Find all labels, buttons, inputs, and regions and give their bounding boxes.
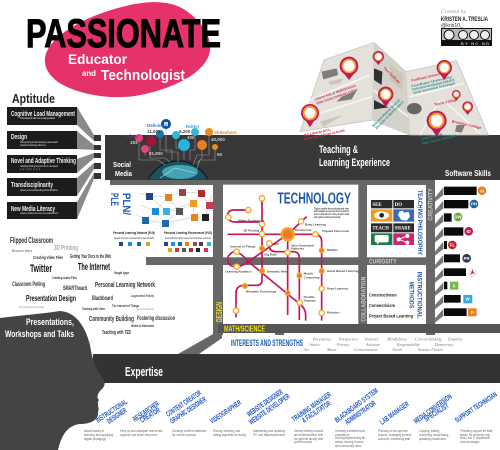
technology description [313, 206, 350, 219]
expertise roles: TRAINING MANAGER [290, 390, 333, 424]
word cloud [10, 236, 175, 336]
math science label: MATH/SCIENCE [224, 324, 265, 334]
map: Associate HS [421, 132, 443, 141]
metro labels: MOOCs [327, 248, 338, 252]
interests and strengths: Science Fiction [418, 347, 443, 352]
word cloud: Classroom Polling [12, 282, 45, 288]
presentations label [5, 317, 74, 339]
expertise roles [94, 386, 499, 427]
expertise band [93, 354, 500, 383]
expertise descriptions: and implementation both [294, 433, 323, 437]
word cloud: Blackboard [92, 296, 113, 302]
technology title: TECHNOLOGY [277, 190, 351, 207]
map: Math Teacher 2002-2006 [422, 134, 457, 146]
interests and strengths: Critical thinking [415, 336, 442, 342]
methods list: Connectivism [369, 303, 395, 309]
PLN PLE captions: Personal Learning Network (PLN) [113, 231, 156, 235]
expertise label: Expertise [125, 364, 163, 379]
expertise descriptions [84, 429, 493, 448]
metro labels: Computing [304, 275, 320, 279]
methods list: Project Based Learning [369, 313, 413, 319]
social labels: 193 [130, 140, 138, 145]
methods list: Constructivism [369, 293, 397, 299]
expertise roles: MEDIA CONVERSION [412, 392, 454, 426]
interests and strengths [231, 336, 462, 352]
social labels: Delicious [147, 123, 168, 128]
map [300, 42, 488, 146]
word cloud: Getting Your Docs to the Web [70, 254, 111, 260]
social labels: 6,200 [179, 129, 191, 134]
PLN PLE heading [108, 193, 132, 215]
metro labels: Learning Analytics [225, 269, 252, 273]
aptitude: Adapting thinking beyond rote or rule-based [20, 165, 59, 168]
expertise descriptions: organize and share resources [120, 433, 157, 437]
expertise descriptions: Creating content materials [172, 429, 206, 433]
metro labels: Displays [304, 298, 316, 302]
credit: Created by [441, 9, 467, 15]
map labels: BS Liberal Arts, [304, 128, 331, 138]
software icons: DW [454, 215, 463, 220]
social labels: 11,000 [147, 129, 161, 134]
word cloud: The Internet [78, 262, 110, 273]
PLN PLE captions: Tools and information used to find and share resources [165, 236, 211, 240]
right panels [361, 181, 500, 324]
aptitude: Transdisciplinarity [11, 182, 53, 189]
word cloud: Creating Video Files [33, 255, 63, 260]
expertise descriptions: learning and applying [84, 433, 113, 437]
expertise descriptions: heads and managers. [460, 440, 480, 444]
map labels: Fordham University [411, 71, 446, 83]
expertise descriptions: digital pedagogy [84, 437, 106, 441]
interests and strengths: Justice [309, 342, 320, 347]
interests and strengths: Travel [392, 347, 403, 352]
network icons [142, 189, 213, 227]
word cloud: Google Apps [114, 270, 129, 275]
metro labels: Flexible [304, 295, 315, 299]
map: New York Medical Services [371, 98, 401, 128]
expertise descriptions: specific schools [294, 440, 312, 444]
map labels: Pace Certificate [383, 66, 401, 84]
aptitude: Literacy and understanding across disciplines [20, 189, 59, 192]
aptitude connectors [77, 107, 94, 219]
globe [148, 160, 208, 179]
PLN PLE captions: Network of people connected with to learn from/with [114, 236, 154, 240]
grey structural frame [110, 178, 435, 354]
expertise descriptions: for online courses [172, 433, 196, 437]
PLN PLE heading: PLE [108, 193, 120, 206]
software icons: X [453, 283, 456, 288]
software icons: W [466, 297, 471, 302]
interests and strengths: Activism [365, 342, 380, 347]
title: PASSIONATE [26, 12, 221, 56]
social labels: 81,800 [149, 151, 163, 156]
expertise roles: WEBSITE DEVELOPER [247, 392, 292, 427]
subtitle: Educator [68, 51, 128, 67]
expertise roles: INSTRUCTIONAL [94, 397, 129, 425]
interests and strengths: INTERESTS AND STRENGTHS [231, 338, 303, 348]
social labels: Twitter [185, 124, 200, 129]
word cloud: SMARTboard [63, 286, 87, 292]
band labels: Learning Experience [319, 157, 390, 169]
subtitle [68, 51, 185, 84]
map: Senior Instructional Technologist [413, 81, 456, 95]
metro labels: Deep Learning [305, 222, 326, 226]
metro labels [225, 218, 359, 315]
metro labels: Batteries [291, 246, 304, 250]
expertise descriptions: ITC and Blackboard sites [253, 433, 285, 437]
expertise descriptions: Copying, editing, [419, 429, 440, 433]
map labels: University of Texas at Austin [304, 128, 345, 142]
metro labels: Wearable Technology [246, 289, 277, 293]
word cloud: 3D Printing [54, 245, 78, 252]
metro labels: Maker Technology [238, 218, 265, 222]
social media label [113, 160, 133, 178]
interests and strengths: Patience [364, 336, 379, 342]
metro labels: Flipped Classroom [322, 229, 350, 233]
interests and strengths: Music [326, 347, 337, 352]
software icons: FL [450, 243, 455, 248]
presentations label: Presentations, [26, 317, 74, 327]
aptitude: solutions [20, 168, 41, 171]
expertise roles: CREATOR [138, 405, 162, 425]
software icons: PH [471, 202, 477, 207]
map: Fordham University [411, 75, 453, 88]
PLN PLE heading: PLN/ [120, 193, 132, 215]
map labels: Ulster County Community College [316, 88, 358, 106]
math science band [218, 324, 500, 333]
philosophy grid: TEACH [372, 226, 389, 231]
aptitude: Design [11, 134, 27, 141]
metro labels: Deep Learning [327, 287, 348, 291]
philosophy grid: SHARE [395, 226, 411, 231]
social labels [126, 123, 237, 157]
metro labels: Internet of Things [230, 244, 256, 248]
technology description: Topics within the evolving and ever [314, 206, 350, 210]
aptitude: Assess, develop and use new media content [20, 212, 58, 215]
software wedges [435, 187, 443, 323]
expertise descriptions: converting, compressing, [419, 433, 449, 437]
aptitude: process for learning outcomes [20, 144, 47, 147]
word cloud: Browser Wars [12, 249, 32, 253]
philosophy grid [371, 200, 414, 245]
expertise descriptions: desk, and IT department [460, 436, 490, 440]
interests and strengths: Perspective [338, 336, 358, 342]
interests and strengths: Privacy [336, 342, 350, 347]
expertise descriptions: Providing on-the-spot tech [378, 429, 408, 433]
metro labels: Wifi [273, 242, 279, 246]
word cloud: Slides & Slideshow [131, 323, 155, 328]
head silhouette [0, 311, 105, 450]
top dark band [105, 135, 500, 180]
expertise descriptions: scanners, overseeing staff [378, 437, 411, 441]
social labels: 40,000 [211, 137, 225, 142]
expertise descriptions: creation; [335, 433, 350, 437]
expertise roles: DESIGNER [105, 406, 129, 426]
metro labels: Mobile [304, 272, 313, 276]
aptitude [7, 91, 101, 219]
circuit lines [139, 129, 215, 170]
map labels: Touro College [434, 98, 458, 107]
aptitude: Recognizing and developing a task-based [20, 141, 59, 144]
interests and strengths: Empathy [447, 336, 462, 342]
map: Bachelor & Math/Science [375, 100, 405, 130]
technology description: access ideas about so that you and I stand [314, 212, 349, 216]
expertise descriptions: and community sites [335, 444, 361, 448]
aptitude: Processing information and managing overload [20, 117, 56, 120]
word cloud: Augmented Reality [131, 293, 154, 298]
map: Professional Development 2009-2015 [412, 78, 455, 92]
word cloud: Physical Personal Data [19, 305, 44, 309]
word cloud: Community Building [89, 316, 134, 323]
PLN / PLE [108, 189, 213, 252]
social labels: Flickr [126, 134, 138, 139]
interests and strengths: Mindfulness [386, 336, 407, 342]
software icons: PR [464, 256, 471, 261]
software icons: ID [466, 229, 471, 234]
instructional panel [367, 265, 426, 324]
expertise roles: LAB MANAGER [378, 399, 411, 427]
word cloud: Teaching with TED [102, 330, 131, 336]
expertise descriptions: Overseeing e-semester/course [335, 429, 365, 433]
philosophy grid: SEE [372, 203, 382, 208]
map labels: Liberal Arts & Math/Science [314, 84, 356, 102]
instructional methods label: METHODS [408, 282, 415, 309]
expertise descriptions: Maintaining and updating [253, 429, 285, 433]
expertise descriptions: Filming, directing, and [213, 429, 240, 433]
philosophy panel [367, 185, 426, 257]
map labels: Brooklyn College [451, 119, 482, 130]
metro labels: Game Based Learning [327, 269, 359, 273]
expertise descriptions: Assist faculty in [84, 429, 104, 433]
metro stations [226, 196, 324, 316]
metro lines [228, 195, 322, 321]
expertise descriptions: Develop training curricula [294, 429, 324, 433]
word cloud: Teaching with Video [82, 306, 105, 311]
philosophy grid: DO [395, 203, 402, 208]
PLN PLE captions [113, 231, 213, 240]
software icons: AI [480, 188, 484, 193]
word cloud: Keyboard Shortcuts [137, 307, 154, 311]
expertise roles: BLACKBOARD SYSTEM [333, 386, 380, 425]
software icons [448, 186, 486, 316]
metro labels: Robotics [327, 311, 340, 315]
subtitle: Technologist [101, 67, 185, 84]
network lines [136, 192, 212, 223]
collaboration label: COLLABORATION [361, 276, 368, 322]
expertise roles: RESEARCHER [131, 399, 161, 424]
teaching philosophy label: TEACHING PHILOSOPHY [416, 190, 423, 256]
methods list [369, 293, 413, 319]
curiosity label: CURIOSITY [369, 259, 397, 266]
band labels [319, 144, 491, 178]
social media label: Media [115, 169, 133, 178]
technology panel [223, 185, 359, 324]
design label: DESIGN [215, 302, 224, 322]
social labels: 400 [187, 135, 195, 140]
social labels: 50 [217, 152, 223, 157]
band labels: Teaching & [319, 144, 358, 156]
expertise descriptions: settings, branding, structure, [335, 440, 364, 444]
expertise roles: SPECIALIST [422, 401, 451, 424]
word cloud: Flipped Classroom [10, 236, 53, 245]
interests and strengths: Art [303, 347, 310, 352]
interests and strengths: Democracy [434, 342, 454, 347]
aptitude: New Media Literacy [11, 206, 55, 213]
expertise descriptions: support, managing printers, [378, 433, 412, 437]
word cloud: Presentation Design [26, 294, 76, 303]
credit: BY NC ND [461, 41, 489, 46]
interests and strengths: Consciousness [354, 347, 378, 352]
expertise descriptions: uploading media/video [419, 437, 446, 441]
metro labels: Big Data [264, 252, 277, 256]
instructional methods label: INSTRUCTIONAL [415, 272, 422, 318]
PLN PLE captions: Personal Learning Environment (PLE) [164, 231, 213, 235]
word cloud: The Internet of Things [112, 304, 139, 308]
interests and strengths: Responsibility [396, 342, 420, 347]
map labels [304, 66, 482, 142]
metro labels: The Internet [294, 228, 311, 232]
map pins [301, 51, 473, 137]
aptitude: Cognitive Load Management [11, 111, 75, 118]
expertise roles: WEBSITE DESIGNER [245, 387, 285, 419]
social bubbles [135, 119, 218, 153]
expertise roles: VIDEOGRAPHER [208, 398, 243, 426]
word cloud: Personal Learning Network [95, 282, 155, 289]
creativity label: CREATIVITY [427, 188, 434, 221]
presentations label: Workshops and Talks [5, 329, 74, 339]
expertise descriptions: editing segments for faculty [213, 433, 246, 437]
social labels: Slideshare [214, 130, 237, 135]
title blob [45, 2, 210, 97]
subtitle: and [82, 69, 96, 78]
credit [441, 9, 492, 46]
word cloud: Creating Audio Files [52, 275, 77, 280]
metro labels: Semantic Web [267, 269, 287, 273]
expertise roles: & FACILITATOR [300, 399, 333, 425]
metro labels: Next Generation [291, 244, 315, 248]
credit: @kris10_ [441, 23, 463, 29]
word cloud: Fostering discussion [137, 316, 175, 322]
technology description: technological ecosystem that I research/ [314, 209, 349, 213]
expertise descriptions: Keep up and anticipate new trends; [120, 429, 163, 433]
social media [113, 119, 237, 179]
aptitude: Novel and Adaptive Thinking [11, 158, 76, 165]
social media label: Social [113, 160, 131, 169]
interests and strengths: Persistence [312, 336, 332, 342]
word cloud: Twitter [30, 263, 52, 275]
expertise roles: CONTENT CREATOR [164, 388, 203, 419]
aptitude: Aptitude [12, 91, 55, 106]
expertise roles: GRAPHIC DESIGNER [168, 395, 208, 426]
expertise roles: ADMINISTRATOR [343, 398, 378, 427]
instructional methods label [408, 272, 422, 318]
software icons: P [471, 310, 474, 315]
software panel [435, 181, 500, 324]
technology description: with regard to teaching and learning. [313, 215, 341, 219]
metro labels: 3D Printing [243, 229, 259, 233]
expertise descriptions: for general faculty and [294, 437, 323, 441]
software bars [444, 187, 477, 316]
PLN PLE icon rows [119, 242, 211, 252]
expertise descriptions: Develop/implementing Bb [335, 436, 365, 440]
